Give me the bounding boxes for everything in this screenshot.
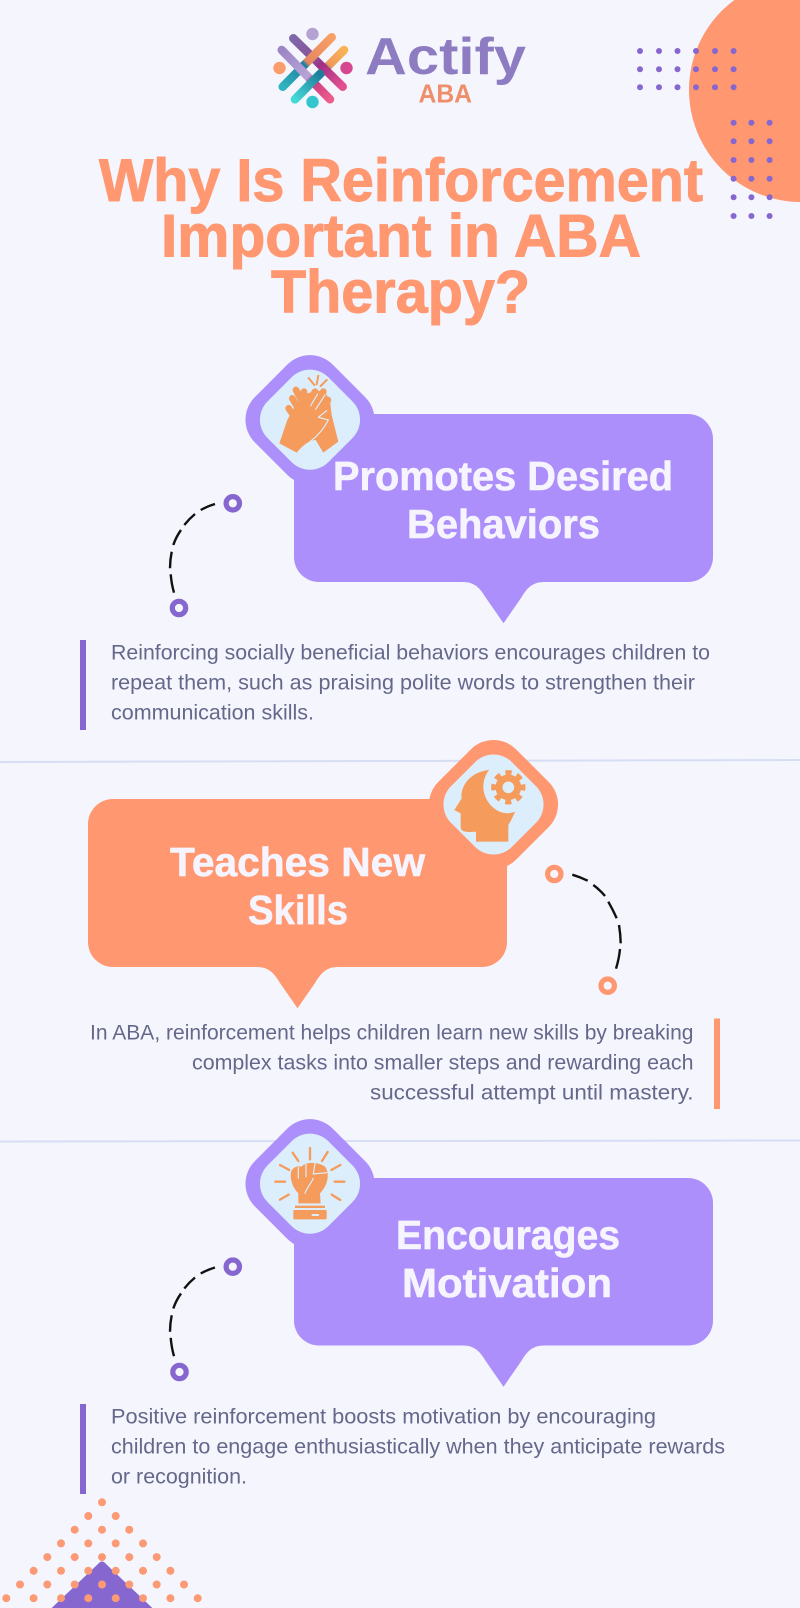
- heading: Behaviors: [407, 501, 600, 547]
- speech card: [294, 414, 713, 623]
- decoration: dot grid vertical: [731, 120, 773, 219]
- icon: head with gear: [416, 727, 571, 882]
- decoration: dot grid horizontal: [637, 48, 737, 90]
- title: Why Is Reinforcement: [99, 147, 703, 214]
- accent bar: [714, 1018, 720, 1109]
- dashed arrow: [170, 1260, 240, 1379]
- speech card: [294, 1178, 713, 1387]
- body text: [111, 1404, 725, 1488]
- panel: promotes desired behaviors: [80, 342, 713, 730]
- logo: Actify ABA: [273, 28, 526, 109]
- body text: or recognition.: [111, 1464, 247, 1488]
- body text: [90, 1020, 694, 1104]
- icon: clapping hands: [232, 342, 388, 497]
- heading: Skills: [248, 887, 348, 933]
- panel: teaches new skills: [88, 727, 720, 1109]
- accent bar: [80, 640, 86, 730]
- logo mark: [273, 28, 353, 108]
- logo subtitle: ABA: [418, 79, 472, 109]
- heading: [170, 839, 425, 933]
- heading: Teaches New: [170, 839, 425, 885]
- panel: encourages motivation: [80, 1106, 725, 1494]
- heading: Encourages: [396, 1212, 620, 1258]
- body text: Reinforcing socially beneficial behaviors encourages children to: [111, 640, 710, 664]
- heading: Promotes Desired: [333, 453, 673, 499]
- icon: raised fist: [232, 1106, 388, 1261]
- body text: communication skills.: [111, 700, 314, 724]
- title: [99, 147, 703, 326]
- body text: successful attempt until mastery.: [370, 1080, 694, 1104]
- heading: Motivation: [402, 1260, 612, 1306]
- logo wordmark: Actify: [365, 28, 526, 86]
- title: Important in ABA: [161, 203, 641, 270]
- title: Therapy?: [271, 259, 530, 326]
- decoration: top right circle: [689, 0, 800, 202]
- body text: In ABA, reinforcement helps children learn new skills by breaking: [90, 1020, 694, 1044]
- body text: complex tasks into smaller steps and rewarding each: [192, 1050, 694, 1074]
- speech card: [88, 799, 507, 1008]
- heading: [333, 453, 673, 547]
- divider lines: [0, 760, 800, 1142]
- body text: Positive reinforcement boosts motivation by encouraging: [111, 1404, 656, 1428]
- dashed arrow: [548, 867, 621, 992]
- body text: repeat them, such as praising polite words to strengthen their: [111, 670, 695, 694]
- heading: [396, 1212, 620, 1306]
- dashed arrow: [170, 497, 240, 615]
- accent bar: [80, 1404, 86, 1494]
- body text: [111, 640, 710, 724]
- decoration: bottom triangle with dots: [2, 1498, 202, 1608]
- body text: children to engage enthusiastically when they anticipate rewards: [111, 1434, 725, 1458]
